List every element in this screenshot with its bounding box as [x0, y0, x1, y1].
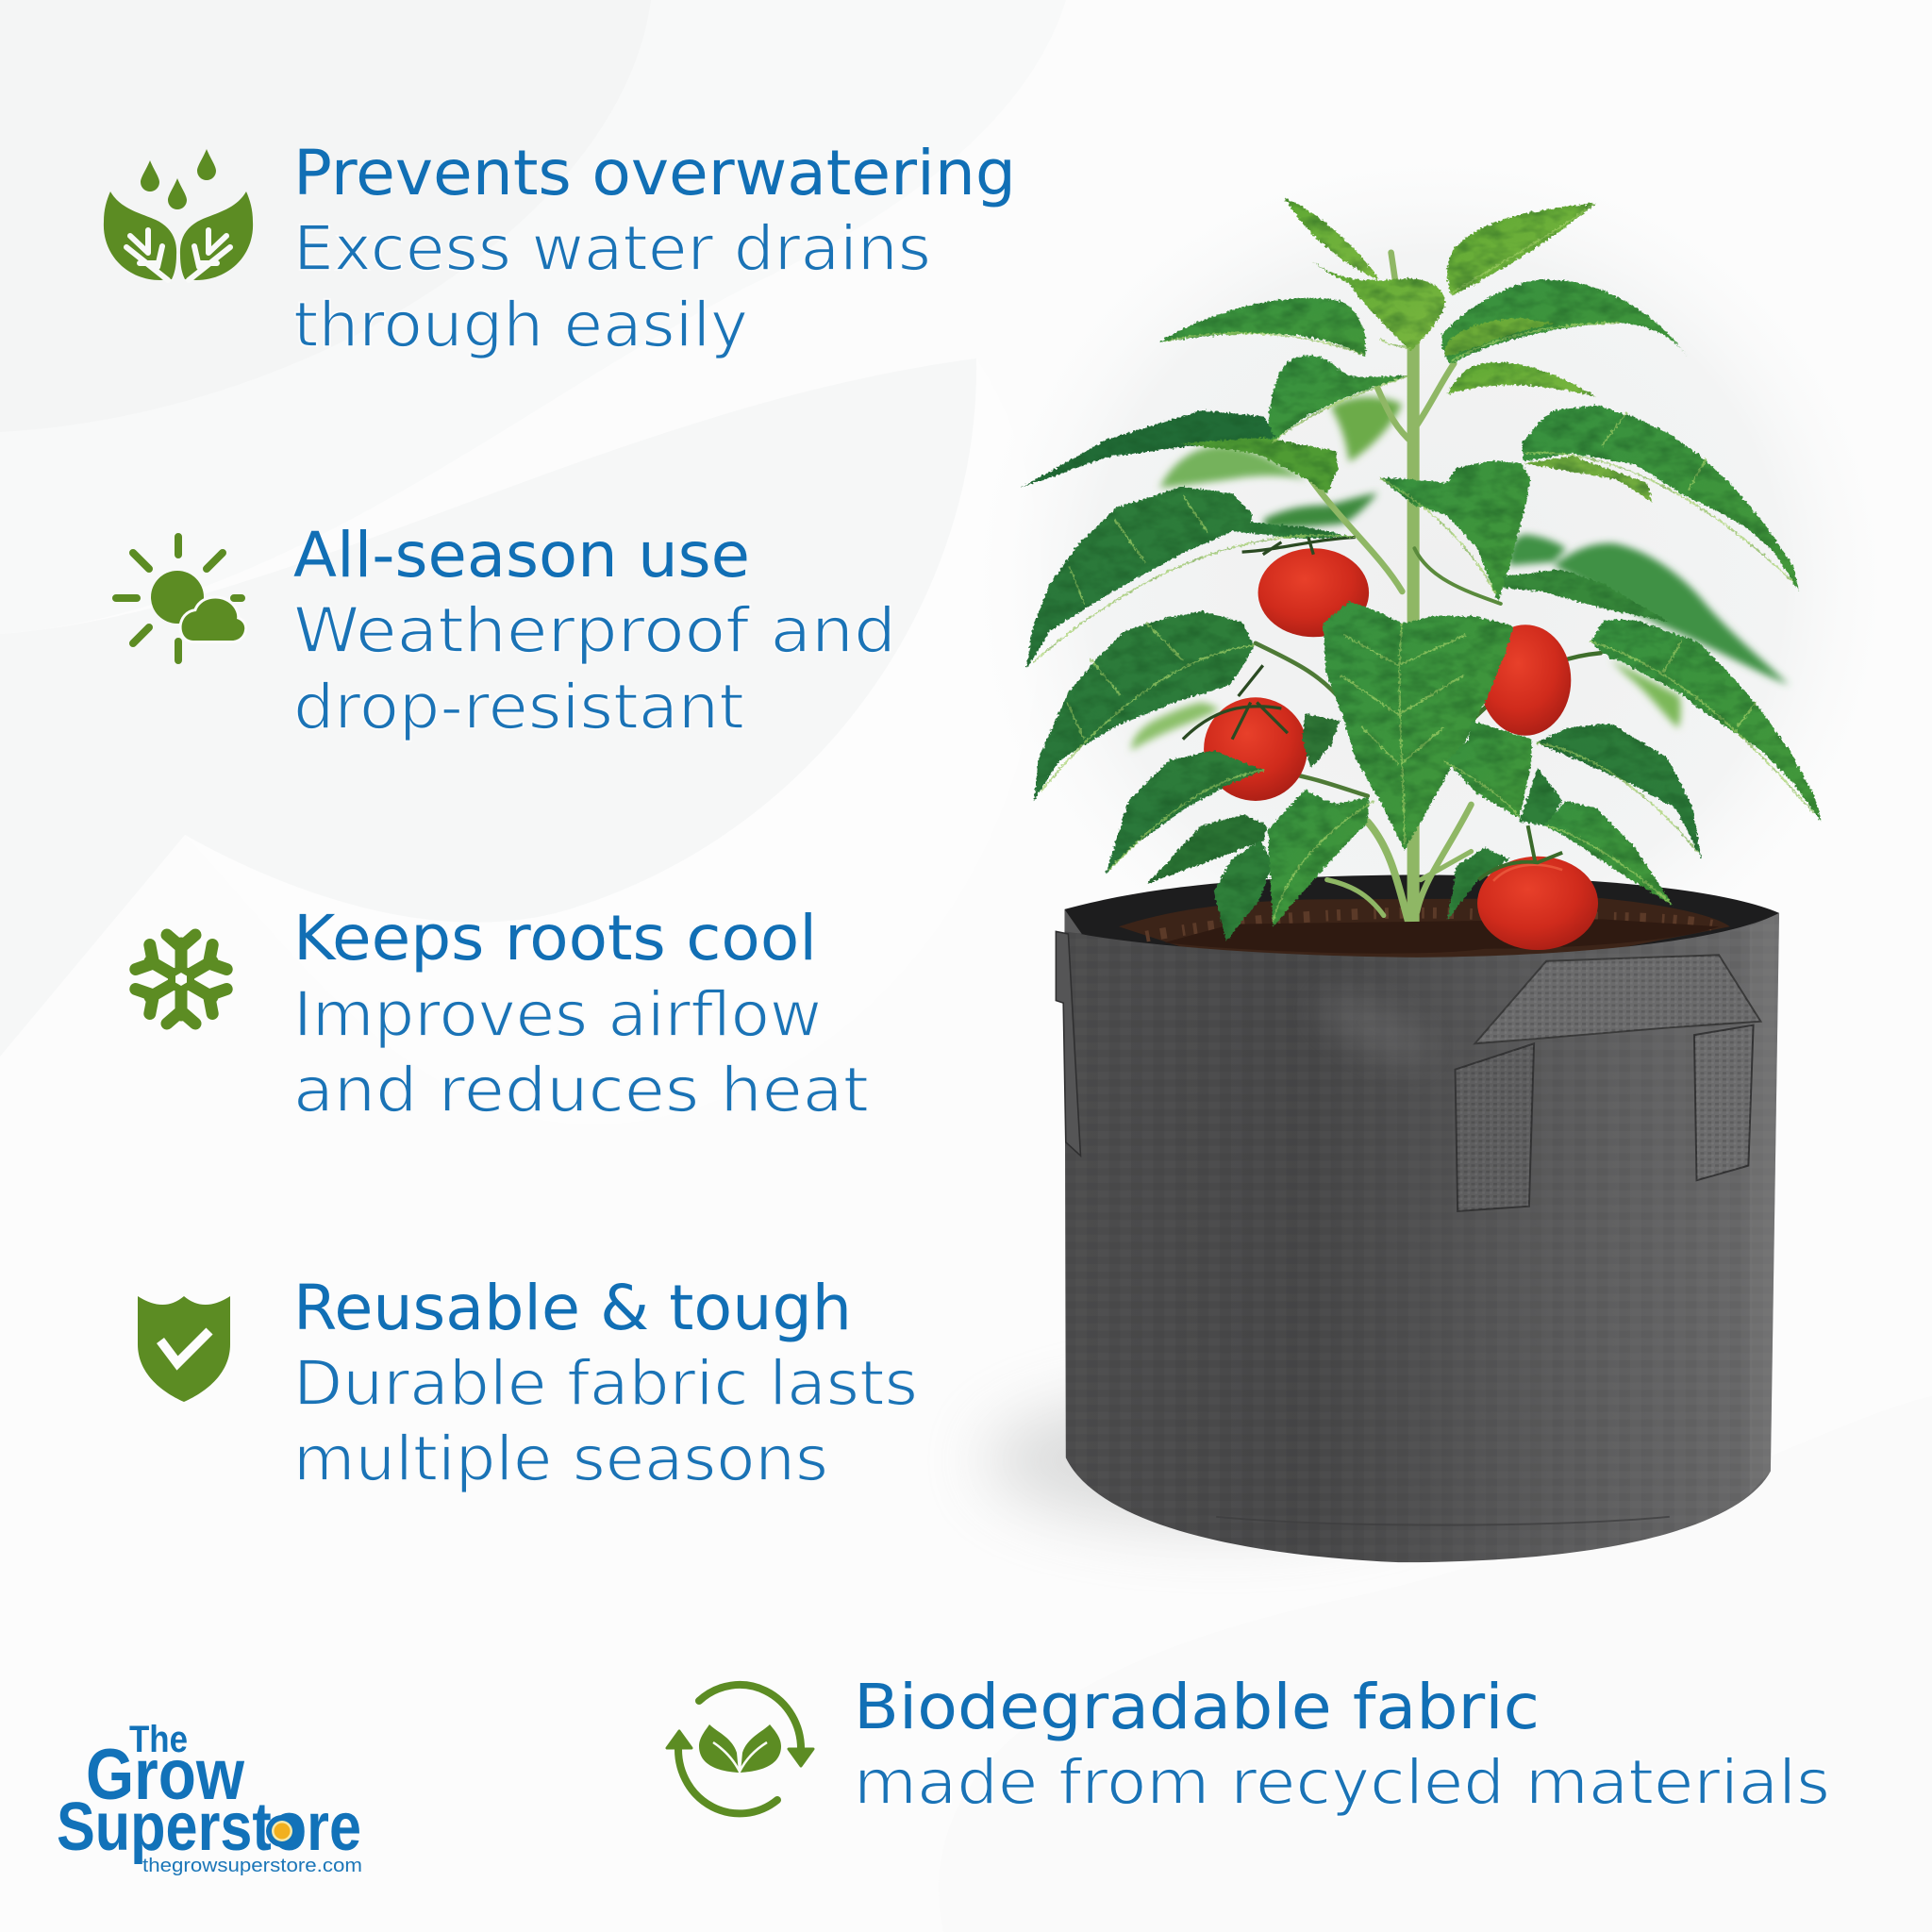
grow bag hem [1216, 1517, 1670, 1525]
bag handle: right front [1456, 955, 1760, 1211]
heading: all-season use: All-season use [293, 519, 750, 591]
logo flower mark [266, 1815, 298, 1847]
product photo: tomato plant in grow bag [986, 197, 1821, 1562]
plant foliage [1020, 197, 1821, 941]
feature 2: all-season use [116, 519, 896, 743]
feature 1: prevents overwatering [104, 137, 1016, 361]
text: multiple seasons: multiple seasons [293, 1423, 828, 1495]
rear rim tip [1064, 909, 1082, 934]
heading: biodegradable fabric: Biodegradable fabric [854, 1671, 1540, 1743]
bottom tomato [1477, 825, 1598, 950]
heading: keeps roots cool: Keeps roots cool [293, 902, 817, 974]
text: weatherproof and: Weatherproof and [293, 594, 896, 667]
text: durable fabric lasts: Durable fabric lasts [293, 1347, 918, 1420]
logo word: the: The [129, 1719, 188, 1760]
icon: water drops on leaves [104, 149, 253, 280]
grow bag weave texture [1064, 913, 1779, 1562]
icon: snowflake [136, 935, 226, 1024]
grow bag right highlight [1750, 913, 1779, 1493]
icon: recycling arrows around leaves [667, 1685, 813, 1813]
callout: biodegradable fabric [667, 1671, 1830, 1819]
logo word: grow: Grow [86, 1735, 245, 1815]
icon: shield with check [138, 1296, 230, 1402]
logo: the grow superstore [57, 1719, 362, 1876]
text: through easily: through easily [293, 289, 748, 361]
heading: prevents overwatering: Prevents overwatering [293, 137, 1016, 209]
text: excess water drains: Excess water drains [293, 212, 931, 285]
leaf veins [1033, 205, 1814, 922]
bag shadow [986, 1392, 1454, 1528]
text: and reduces heat: and reduces heat [293, 1054, 869, 1126]
plant rear leaves [1131, 397, 1789, 750]
icon: sun and cloud [116, 537, 244, 660]
tomatoes behind foliage [1183, 530, 1571, 801]
bag handle: left side [1056, 931, 1080, 1156]
text: made from recycled materials: made from recycled materials [854, 1746, 1830, 1819]
grow bag inner rim and back soil [1064, 874, 1779, 963]
upper mid leaves [1268, 356, 1408, 446]
plant stems [1256, 253, 1601, 937]
heading: reusable and tough: Reusable & tough [293, 1272, 852, 1344]
lower side leaves [1591, 620, 1821, 822]
grow bag body [1064, 913, 1779, 1562]
grow bag fold highlight [1308, 983, 1439, 1075]
top leaves [1284, 197, 1380, 281]
front soil [1164, 919, 1719, 954]
logo word: superstore: Superstore [57, 1790, 361, 1865]
logo url: thegrowsuperstore.com [142, 1855, 362, 1876]
text: drop-resistant: drop-resistant [293, 671, 744, 743]
feature 3: keeps roots cool [136, 902, 869, 1126]
feature 4: reusable and tough [138, 1272, 918, 1495]
text: improves airflow: Improves airflow [293, 978, 822, 1051]
